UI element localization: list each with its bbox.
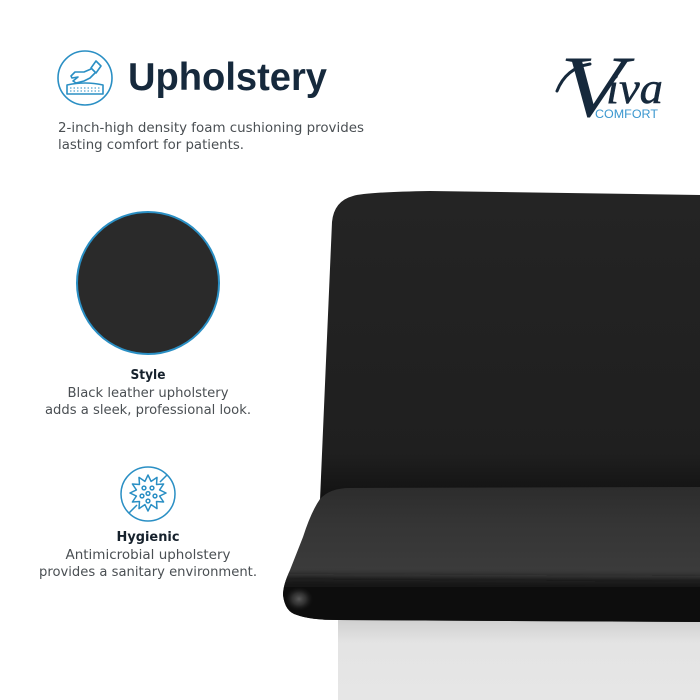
- hygienic text: [39, 530, 257, 580]
- intro text: lasting comfort for patients.: [58, 138, 244, 153]
- logo: Viva Comfort: iva: [606, 64, 663, 113]
- intro text: [58, 121, 364, 153]
- seat cushion: [283, 487, 700, 622]
- chair illustration: [283, 191, 700, 700]
- hygienic text: Hygienic: [116, 530, 180, 545]
- style text: adds a sleek, professional look.: [45, 403, 251, 418]
- logo: Viva Comfort: COMFORT: [595, 107, 659, 121]
- style text: Style: [130, 368, 166, 383]
- logo: Viva Comfort: V: [560, 38, 635, 136]
- hygienic text: provides a sanitary environment.: [39, 565, 257, 580]
- style text: [45, 368, 251, 418]
- backrest cushion: [320, 191, 700, 500]
- icon: germ crossed out: [121, 467, 175, 521]
- icon: hand pressing foam: [58, 51, 112, 105]
- white base cabinet: [338, 619, 700, 700]
- logo: Viva Comfort: [557, 38, 663, 136]
- hygienic text: Antimicrobial upholstery: [66, 548, 231, 563]
- leather swatch: [77, 212, 219, 354]
- intro text: 2-inch-high density foam cushioning provides: [58, 121, 364, 136]
- style text: Black leather upholstery: [68, 386, 229, 401]
- title: Upholstery: [128, 56, 327, 99]
